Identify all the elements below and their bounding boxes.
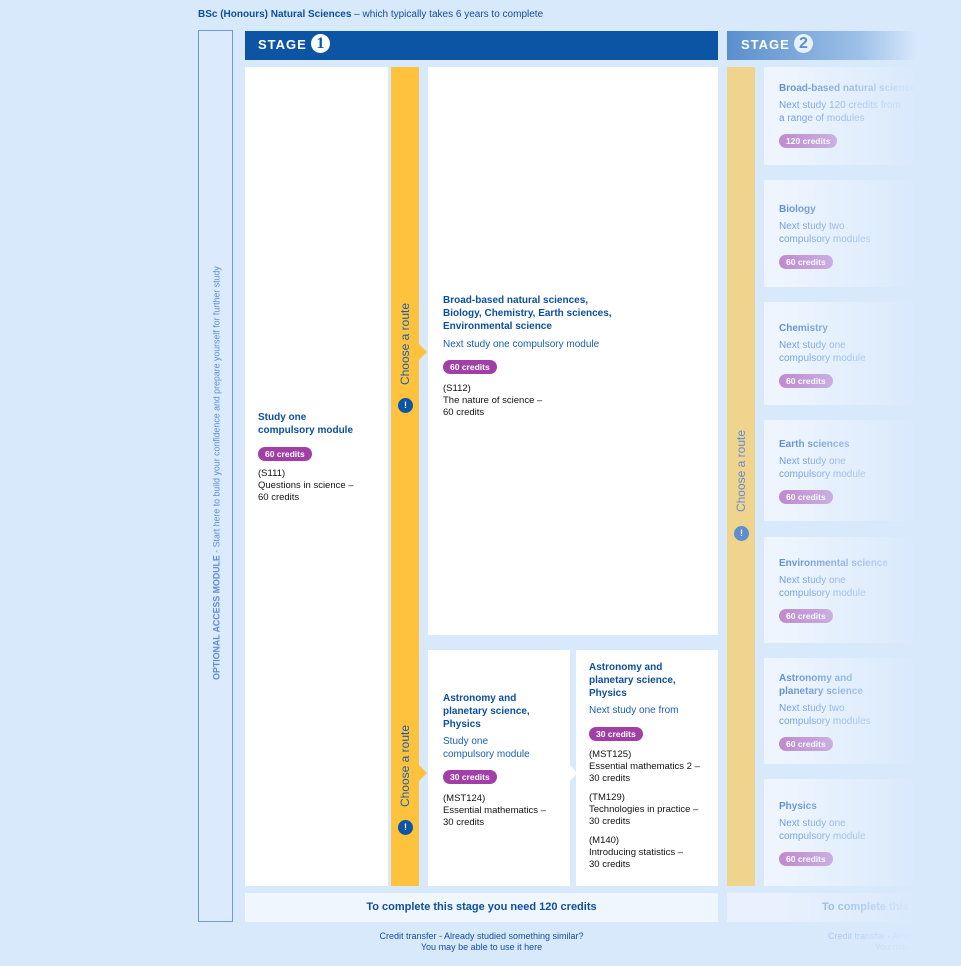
stage 1 header: 1 — [316, 35, 325, 52]
stage 2 panel: compulsory modules — [779, 234, 871, 245]
card: astronomy compulsory: 30 credits — [450, 772, 490, 782]
stage 2 panel: compulsory module — [779, 831, 866, 842]
stage 2 panel: Biology — [779, 204, 816, 215]
stage 2 footer: To complete this stage — [822, 901, 940, 913]
card: broad-based route: Environmental science — [443, 321, 552, 332]
stage 2 panel: Next study one — [779, 456, 846, 467]
card: study one compulsory module: 60 credits — [265, 449, 305, 459]
card: astronomy next: 30 credits — [589, 816, 630, 827]
card: astronomy compulsory: Study one — [443, 736, 488, 747]
stage 2 bar — [727, 67, 755, 886]
card: study one compulsory module: 60 credits — [258, 492, 299, 503]
choose a route bar: ! — [404, 400, 407, 410]
choose a route bar: Choose a route — [398, 303, 412, 385]
stage 2 bar: Choose a route — [734, 430, 748, 512]
stage 2 panel: Earth sciences — [779, 439, 850, 450]
credit transfer: You may be able to use it here — [421, 942, 542, 952]
fade overlay — [780, 60, 961, 966]
card: broad-based route — [428, 67, 718, 635]
stage 2 header — [727, 31, 917, 60]
stage 2 credit transfer: You may be — [875, 942, 922, 952]
choose a route bar: ! — [404, 822, 407, 832]
stage 2 panel: planetary science — [779, 686, 863, 697]
panel: optional access module: OPTIONAL ACCESS MODULE - Start here to build your confidence and prepare yourself for further study — [212, 266, 222, 680]
card: astronomy next: Astronomy and — [589, 662, 662, 673]
stage 2 cards: Broad-based natural sciences — [779, 83, 921, 94]
stage 2 panel: Astronomy and — [779, 673, 852, 684]
stage 2 header: 2 — [799, 35, 809, 52]
card: astronomy compulsory: Essential mathematics – — [443, 805, 546, 816]
card: broad-based route: Biology, Chemistry, Earth sciences, — [443, 308, 612, 319]
stage 2 panel — [727, 31, 940, 952]
card: study one compulsory module: Study one — [258, 412, 306, 423]
card: astronomy next: planetary science, — [589, 675, 676, 686]
stage 2 panel: Chemistry — [779, 323, 828, 334]
card: astronomy next: Next study one from — [589, 705, 678, 716]
stage 2 cards — [764, 67, 961, 165]
card: astronomy next: Essential mathematics 2 – — [589, 761, 700, 772]
arrow: route 2 — [419, 765, 427, 781]
stage 2 panel: compulsory module — [779, 469, 866, 480]
card: study one compulsory module: Questions in science – — [258, 480, 354, 491]
stage 2 panel: Physics — [779, 801, 817, 812]
card: astronomy compulsory: 30 credits — [443, 817, 484, 828]
card: broad-based route: 60 credits — [443, 407, 484, 418]
stage 2 panel: Next study two — [779, 221, 845, 232]
stage 2 header: STAGE — [741, 37, 790, 52]
title: BSc (Honours) Natural Sciences – which typically takes 6 years to complete — [198, 9, 543, 20]
card: study one compulsory module: (S111) — [258, 468, 285, 479]
stage 2 panel: 60 credits — [786, 854, 826, 864]
card: astronomy next: (MST125) — [589, 749, 631, 760]
stage 2 panel: 60 credits — [786, 611, 826, 621]
card: astronomy compulsory: Astronomy and — [443, 693, 516, 704]
card: astronomy compulsory: (MST124) — [443, 793, 485, 804]
card: astronomy next: (M140) — [589, 835, 619, 846]
panel: optional access module — [198, 30, 233, 922]
card: astronomy next: (TM129) — [589, 792, 625, 803]
card: broad-based route: Next study one compulsory module — [443, 339, 599, 350]
stage 2 panel: Next study one — [779, 818, 846, 829]
card: astronomy compulsory — [428, 650, 570, 886]
card: astronomy next: 30 credits — [589, 773, 630, 784]
card: astronomy next: 30 credits — [589, 859, 630, 870]
stage 2 panel: 60 credits — [786, 739, 826, 749]
stage 2 panel: compulsory modules — [779, 716, 871, 727]
stage 2 cards: 120 credits — [786, 136, 830, 146]
stage 2 footer — [727, 893, 961, 922]
stage 2 panel: Environmental science — [779, 558, 888, 569]
card: broad-based route: 60 credits — [450, 362, 490, 372]
stage 2 cards: a range of modules — [779, 113, 865, 124]
choose a route bar: Choose a route — [398, 725, 412, 807]
choose a route bar — [391, 67, 419, 886]
stage 2 panel: Next study one — [779, 575, 846, 586]
arrow: route 1 — [419, 344, 427, 360]
card: astronomy next — [576, 650, 718, 886]
stage 2 bar: ! — [740, 528, 743, 538]
card: astronomy next: Physics — [589, 688, 627, 699]
stage 2 panel: 60 credits — [786, 376, 826, 386]
stage 1 footer: To complete this stage you need 120 credits — [366, 901, 597, 913]
card: astronomy compulsory: planetary science, — [443, 706, 530, 717]
stage 2 panel: 60 credits — [786, 492, 826, 502]
card: astronomy next: Introducing statistics – — [589, 847, 683, 858]
stage 2 panel: Next study one — [779, 340, 846, 351]
card: astronomy next: Technologies in practice – — [589, 804, 698, 815]
credit transfer — [379, 931, 584, 952]
card: broad-based route: Broad-based natural sciences, — [443, 295, 588, 306]
card: broad-based route: (S112) — [443, 383, 471, 394]
card: study one compulsory module — [245, 67, 388, 886]
arrow: between astronomy cards — [570, 765, 577, 781]
stage 1 header — [245, 31, 718, 60]
card: astronomy compulsory: compulsory module — [443, 749, 530, 760]
card: study one compulsory module: compulsory module — [258, 425, 353, 436]
stage 2 panel: 60 credits — [786, 257, 826, 267]
stage 2 cards: Next study 120 credits from — [779, 100, 901, 111]
stage 2 panel: Next study two — [779, 703, 845, 714]
card: astronomy next: 30 credits — [596, 729, 636, 739]
credit transfer: Credit transfer - Already studied something similar? — [379, 931, 584, 941]
stage 2 credit transfer: Credit transfer - Already — [828, 931, 923, 941]
card: astronomy compulsory: Physics — [443, 719, 481, 730]
stage 2 credit transfer — [828, 931, 923, 952]
stage 1 header: STAGE — [258, 37, 307, 52]
card: broad-based route: The nature of science – — [443, 395, 542, 406]
stage 2 panel: compulsory module — [779, 588, 866, 599]
stage 1 footer — [245, 893, 718, 922]
stage 2 panel: compulsory module — [779, 353, 866, 364]
